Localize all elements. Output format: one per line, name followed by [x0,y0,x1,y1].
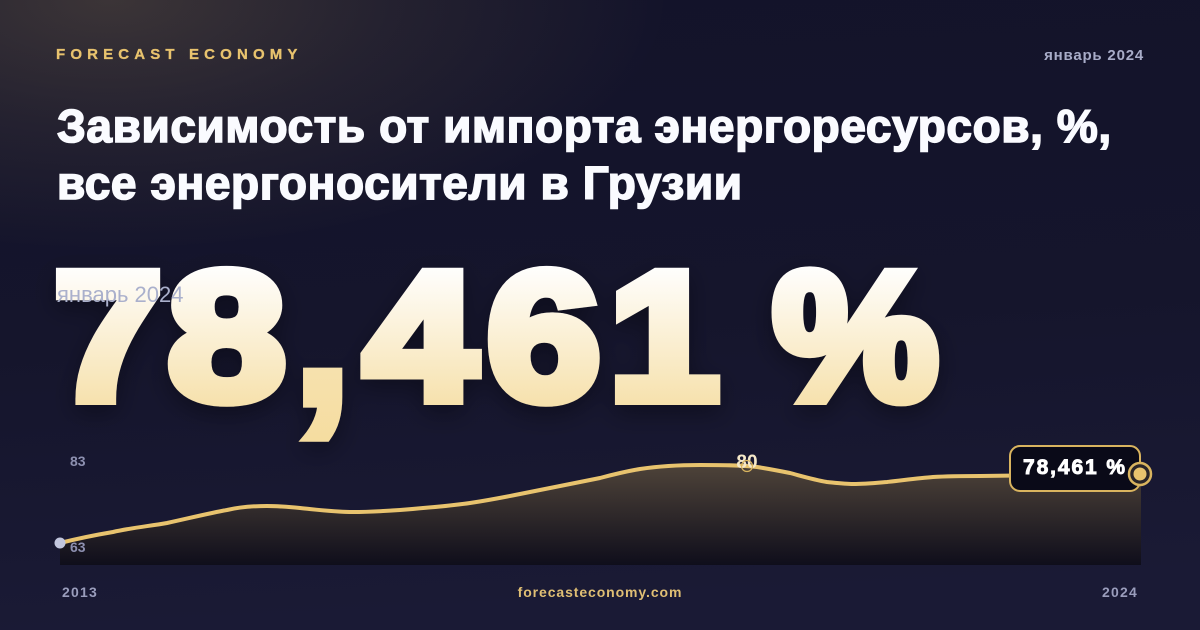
y axis max: 83 [70,453,86,469]
peak label: 80 [736,452,758,473]
current value callout: 78,461 % [1023,456,1127,479]
date overlay on value: январь 2024 [57,282,184,307]
big value: 4 [364,234,476,438]
chart area fill [60,465,1141,565]
brand label: FORECAST ECONOMY [56,46,303,63]
big value: 8 [168,235,285,438]
peak marker [742,460,752,472]
y axis min: 63 [70,539,86,555]
big value: % [773,235,938,438]
big value: 7 [54,234,162,438]
title: Зависимость от импорта энергоресурсов, %, [57,100,1112,152]
start point [54,538,66,548]
current value marker [1129,463,1151,485]
x axis start year: 2013 [62,584,98,600]
big value: 1 [609,236,719,438]
big value: , [291,205,354,451]
x axis end year: 2024 [1102,584,1138,600]
title: все энергоносители в Грузии [57,157,743,209]
date label: январь 2024 [1044,47,1144,64]
chart line [60,465,1140,543]
big value: 6 [487,234,600,438]
title [57,100,1112,209]
chart: import dependency line [54,446,1151,565]
current value callout [1010,446,1140,491]
big value [54,205,938,451]
source url: forecasteconomy.com [518,584,682,600]
